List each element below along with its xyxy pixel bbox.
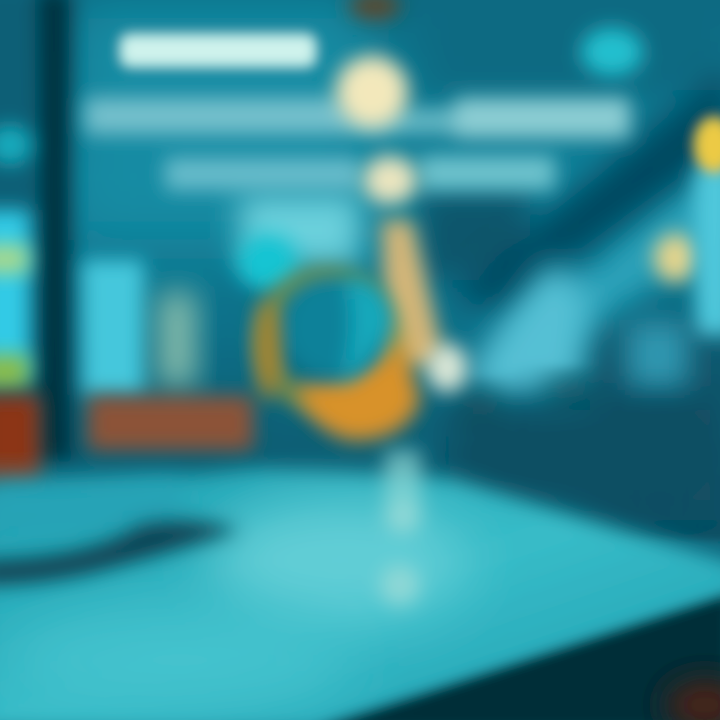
left light panels (82, 234, 298, 450)
glowing lights (336, 56, 720, 335)
teal badge (581, 28, 643, 76)
white glow (427, 344, 467, 392)
dark smudge on table (0, 521, 240, 585)
heading bar (120, 34, 316, 67)
background wall (0, 0, 720, 540)
tall cone (382, 220, 445, 365)
diagonal dark beam (450, 65, 720, 310)
table surface (0, 468, 720, 720)
top dark fixture (349, 0, 401, 20)
blurred title line two (165, 156, 555, 190)
left column (0, 0, 71, 485)
diagonal light beam (500, 150, 720, 350)
right light panels (450, 262, 710, 500)
pie chart circle (256, 276, 420, 440)
dark table edge (315, 594, 720, 720)
vertical reflection (380, 450, 421, 605)
blurred title line one (85, 98, 630, 138)
